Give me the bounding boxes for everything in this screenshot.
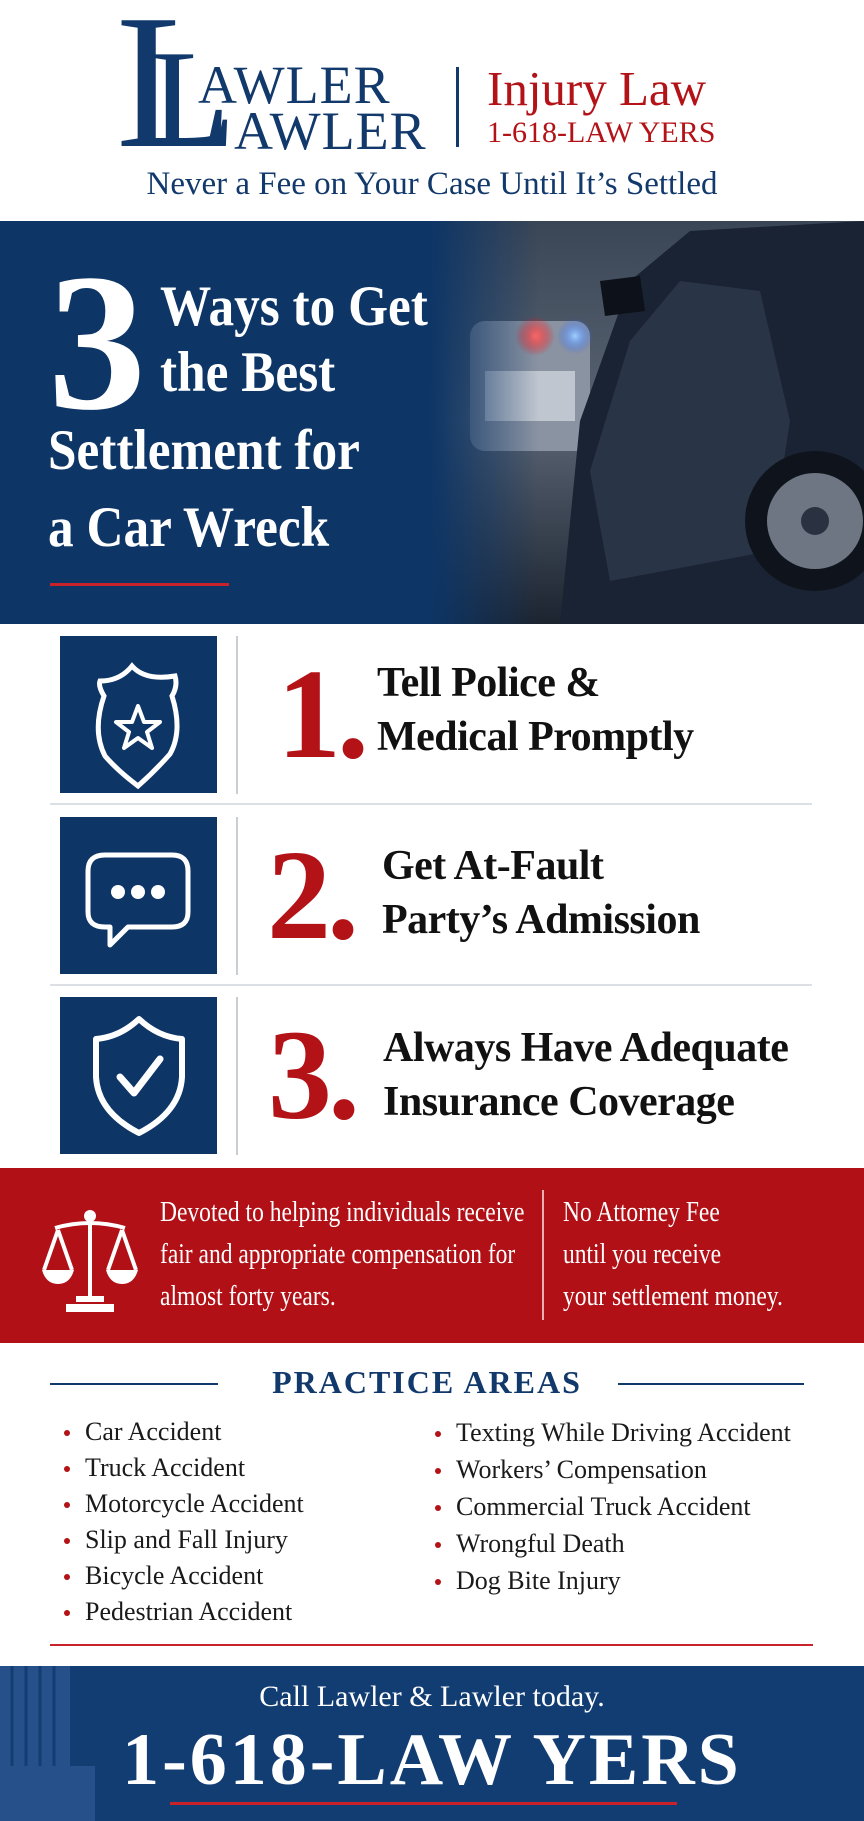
red band text left: Devoted to helping individuals receive bbox=[160, 1197, 524, 1228]
hero title: Settlement for bbox=[48, 419, 360, 482]
header: injury law bbox=[487, 61, 715, 149]
header: injury law: Injury Law bbox=[487, 61, 706, 116]
red band bbox=[0, 1168, 864, 1343]
header: logo bbox=[116, 0, 427, 188]
step 1 text: Tell Police & bbox=[377, 660, 600, 706]
footer call to action bbox=[0, 1666, 864, 1821]
step 2 text: Party’s Admission bbox=[382, 897, 700, 943]
hero title: Ways to Get bbox=[160, 275, 428, 338]
hero photo bbox=[442, 221, 864, 624]
red band text left bbox=[160, 1197, 524, 1312]
header: logo: L bbox=[150, 22, 236, 177]
practice areas list right: Wrongful Death bbox=[456, 1529, 625, 1558]
icon: shield check bbox=[60, 997, 217, 1154]
practice areas list left: Bicycle Accident bbox=[85, 1561, 263, 1590]
practice areas list left: Car Accident bbox=[85, 1417, 221, 1446]
practice areas list right bbox=[435, 1418, 791, 1595]
icon: chat bubble bbox=[60, 817, 217, 974]
number 1: 1. bbox=[277, 643, 365, 785]
logo words: AWLER bbox=[198, 55, 391, 115]
hero title: the Best bbox=[160, 341, 335, 404]
step 1 text bbox=[377, 660, 694, 760]
hero title: 3 bbox=[48, 234, 146, 451]
tagline: Never a Fee on Your Case Until It’s Settled bbox=[146, 166, 718, 202]
red band text left: almost forty years. bbox=[160, 1281, 336, 1312]
hero title bbox=[48, 234, 428, 559]
red band text right: your settlement money. bbox=[563, 1281, 783, 1312]
number 2: 2. bbox=[267, 824, 355, 966]
step 1 bbox=[60, 636, 694, 794]
step 1 text: Medical Promptly bbox=[377, 714, 694, 760]
practice areas list left: Truck Accident bbox=[85, 1453, 245, 1482]
step 3 text: Always Have Adequate bbox=[383, 1025, 788, 1071]
practice areas list right: Workers’ Compensation bbox=[456, 1455, 707, 1484]
icon: police badge bbox=[60, 636, 217, 793]
header divider bbox=[456, 67, 459, 147]
header: injury law: 1-618-LAW YERS bbox=[487, 116, 715, 149]
practice areas list right: Texting While Driving Accident bbox=[456, 1418, 791, 1447]
step 3 text bbox=[383, 1025, 788, 1125]
footer phone: 1-618-LAW YERS bbox=[122, 1719, 742, 1801]
practice areas list left bbox=[64, 1417, 304, 1626]
red band text right bbox=[563, 1197, 783, 1312]
step 3 text: Insurance Coverage bbox=[383, 1079, 734, 1125]
step 2 bbox=[60, 817, 700, 975]
number 3: 3. bbox=[268, 1004, 356, 1146]
practice areas list left: Pedestrian Accident bbox=[85, 1597, 292, 1626]
hero panel bbox=[0, 221, 864, 624]
step 3 bbox=[60, 997, 788, 1155]
icon: scales of justice bbox=[42, 1210, 138, 1312]
practice areas list left: Motorcycle Accident bbox=[85, 1489, 304, 1518]
practice areas list left: Slip and Fall Injury bbox=[85, 1525, 288, 1554]
hero title: a Car Wreck bbox=[48, 496, 329, 559]
hero red underline bbox=[50, 583, 229, 586]
red band text left: fair and appropriate compensation for bbox=[160, 1239, 515, 1270]
red band text right: until you receive bbox=[563, 1239, 721, 1270]
practice areas list right: Dog Bite Injury bbox=[456, 1566, 621, 1595]
practice areas heading: PRACTICE AREAS bbox=[272, 1364, 582, 1400]
red band text right: No Attorney Fee bbox=[563, 1197, 720, 1228]
icon: column bbox=[0, 1666, 95, 1821]
practice areas list right: Commercial Truck Accident bbox=[456, 1492, 751, 1521]
footer text: Call Lawler & Lawler today. bbox=[259, 1680, 605, 1713]
step 2 text bbox=[382, 843, 700, 943]
header: logo: AWLER bbox=[234, 101, 427, 161]
step 2 text: Get At-Fault bbox=[382, 843, 603, 889]
